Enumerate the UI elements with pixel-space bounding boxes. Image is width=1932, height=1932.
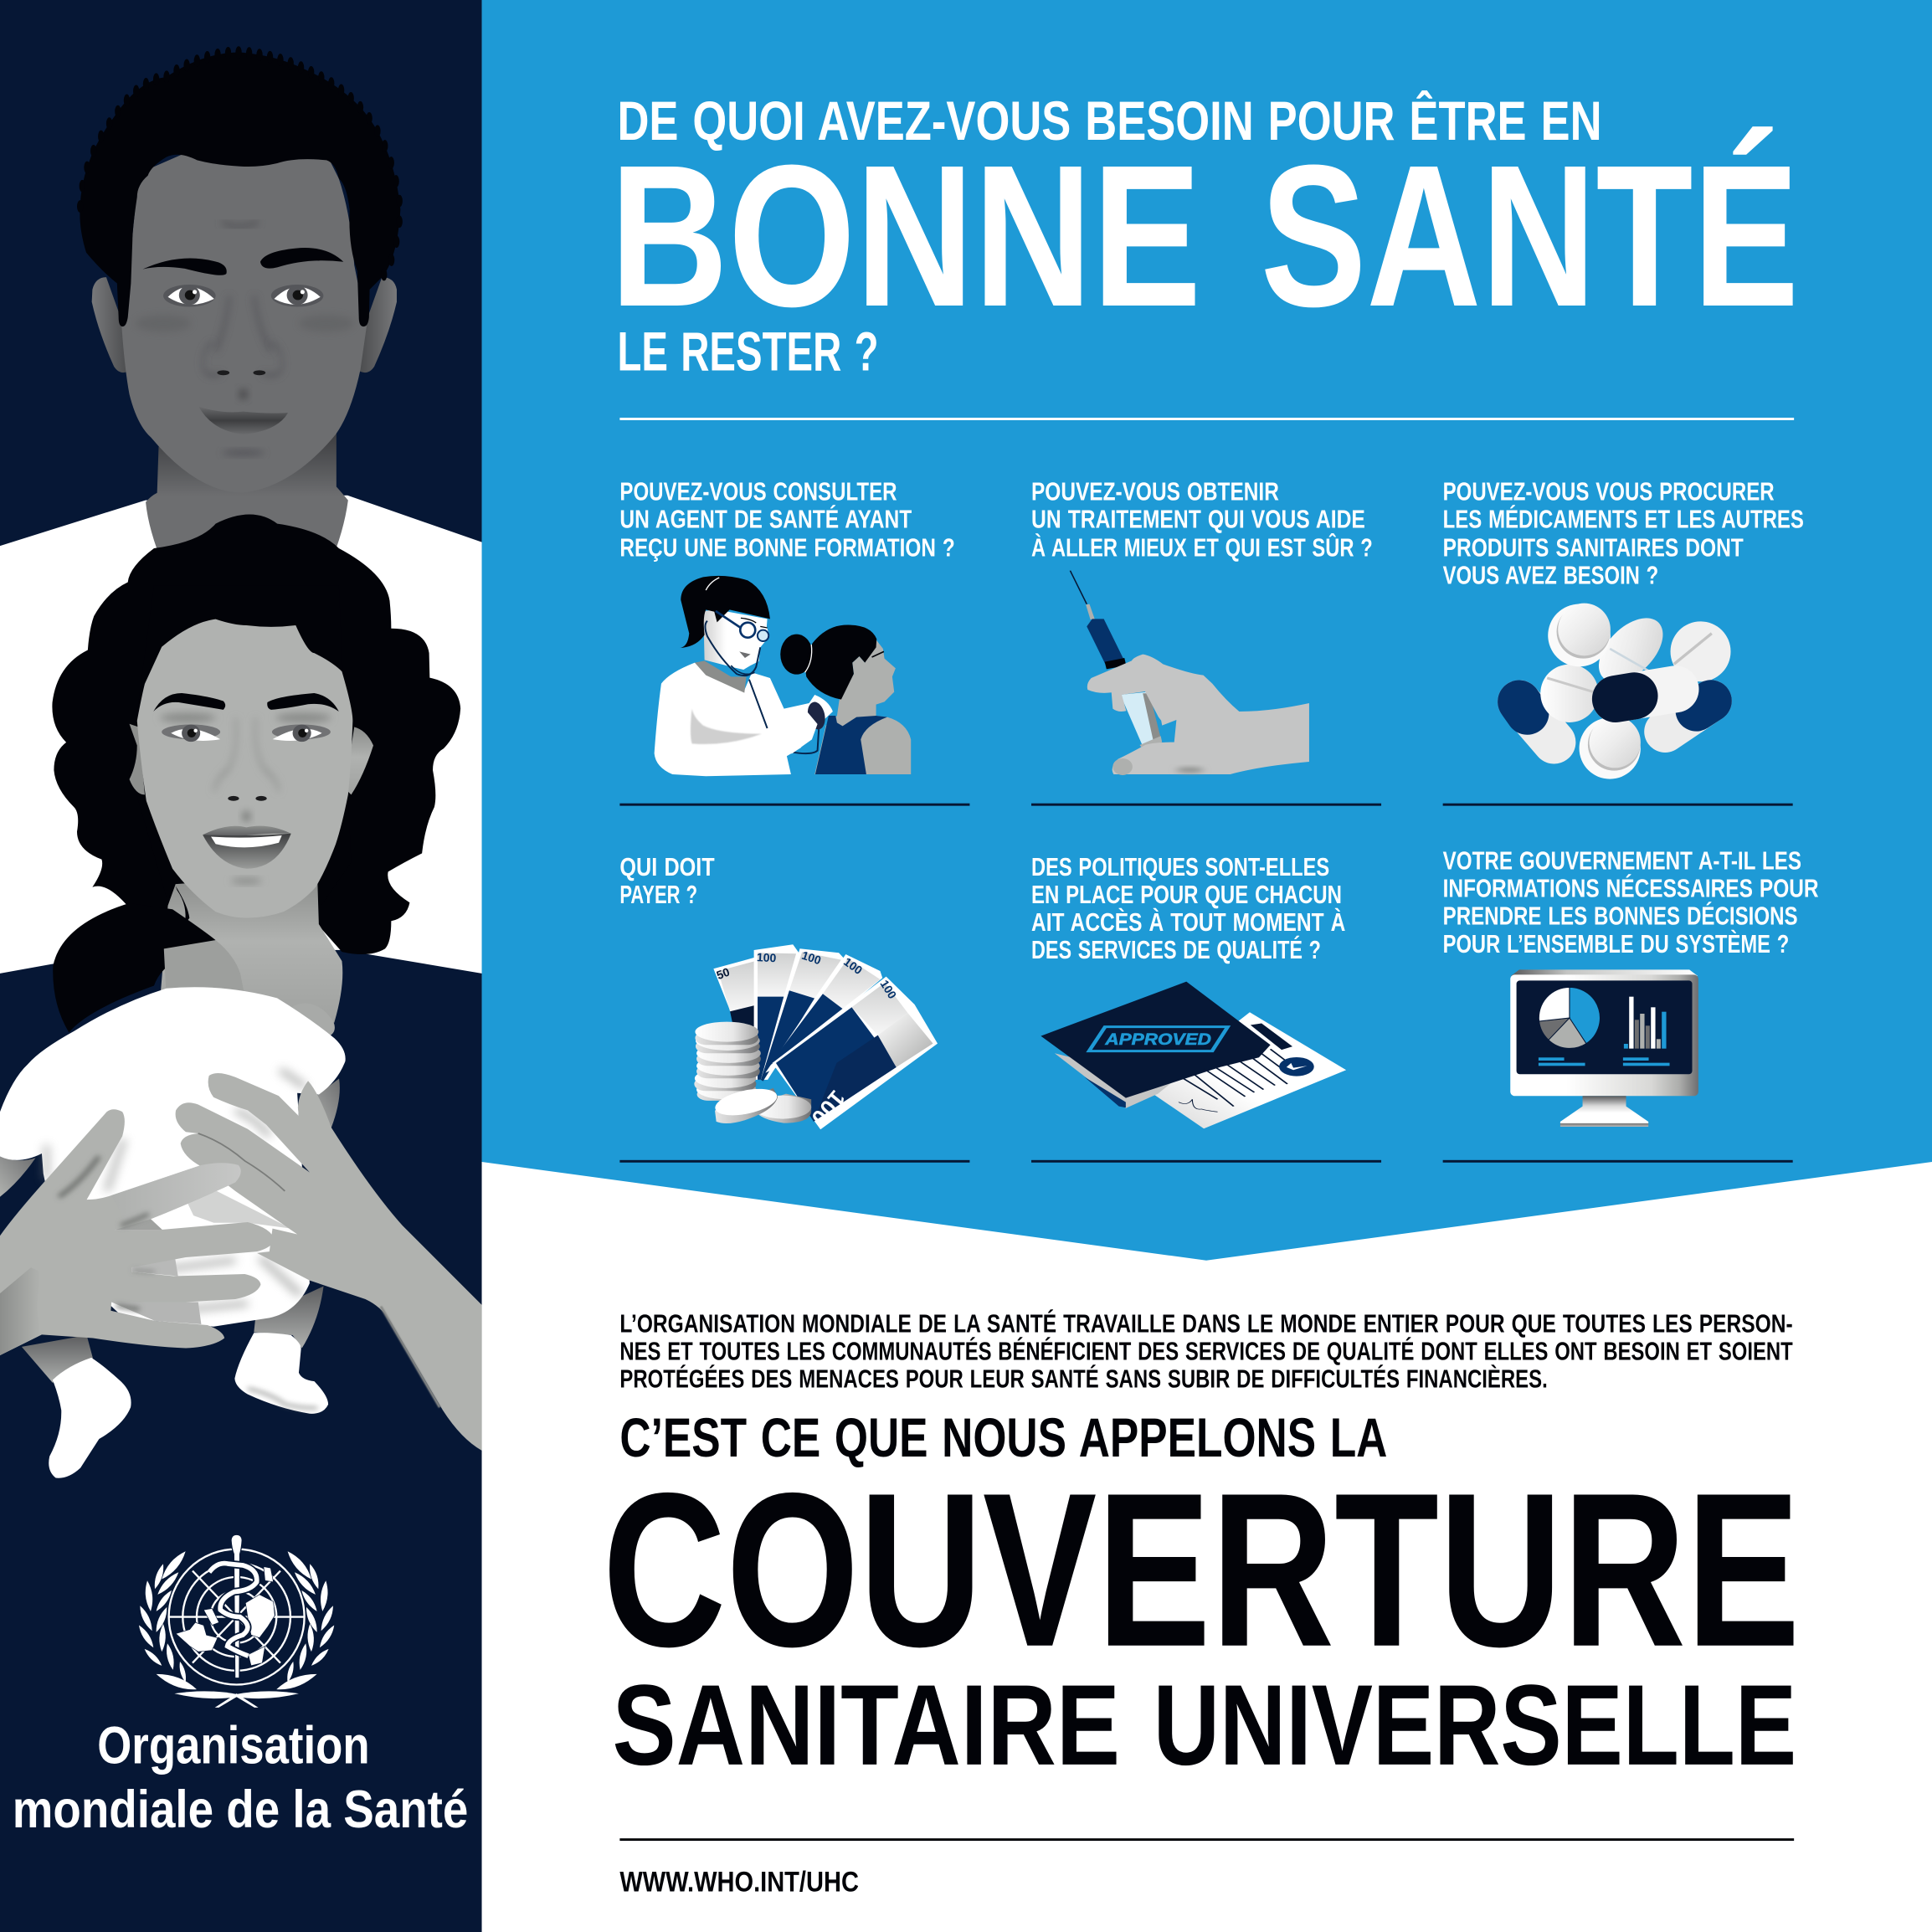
icon: doctor and patient	[655, 576, 911, 776]
text: website address: WWW.WHO.INT/UHC	[619, 1866, 859, 1898]
far-side arm and hand	[176, 1073, 482, 1451]
icon: pills	[1519, 604, 1731, 779]
heading: universal health coverage: SANITAIRE	[613, 1662, 1120, 1790]
logo text: Organisation mondiale de la Santé: Organisation	[97, 1716, 370, 1775]
text block: WHO statement	[619, 1310, 1793, 1393]
panel: left portrait column	[0, 0, 482, 1932]
text block: government information: PRENDRE LES BONNES DÉCISIONS	[1443, 902, 1798, 931]
icon: computer monitor with charts	[1510, 969, 1698, 1127]
panel: blue header background	[482, 0, 1932, 1932]
text block: government information	[1443, 847, 1819, 958]
banknote values: 100	[806, 1086, 850, 1131]
baby body	[0, 987, 346, 1327]
baby head	[53, 903, 216, 1032]
text block: WHO statement: PROTÉGÉES DES MENACES POUR LEUR SANTÉ SANS SUBIR DE DIFFICULTÉS FINANCIÈRES.	[619, 1364, 1548, 1393]
baby arm and rear shade	[0, 1157, 36, 1197]
icon: approved folder and document	[1041, 982, 1346, 1128]
patient	[780, 625, 911, 774]
text block: government information: VOTRE GOUVERNEMENT A-T-IL LES	[1443, 847, 1801, 875]
text block: who pays	[619, 854, 715, 909]
text block: question treatment: UN TRAITEMENT QUI VOUS AIDE	[1031, 506, 1365, 534]
bar chart	[1624, 997, 1667, 1049]
heading: universal health coverage: C’EST CE QUE NOUS APPELONS LA	[619, 1407, 1387, 1468]
woman nose and mouth	[203, 717, 291, 884]
shadows on body	[46, 1070, 305, 1312]
text block: question treatment	[1031, 479, 1373, 563]
woman neck and chest	[160, 875, 342, 1023]
logo text: Organisation mondiale de la Santé: mondiale de la Santé	[13, 1780, 468, 1839]
text block: question treatment: POUVEZ-VOUS OBTENIR	[1031, 479, 1279, 506]
text block: who pays: PAYER ?	[619, 881, 697, 909]
approved stamp text: APPROVED	[1104, 1031, 1211, 1049]
text block: government information: POUR L’ENSEMBLE DU SYSTÈME ?	[1443, 930, 1789, 958]
text block: government information: INFORMATIONS NÉCESSAIRES POUR	[1443, 875, 1819, 903]
banknote values: 100	[757, 950, 777, 964]
dividers row one	[619, 804, 1793, 806]
man eyebrows	[142, 248, 343, 275]
logo: WHO emblem	[139, 1534, 334, 1708]
man eyes	[163, 285, 323, 307]
logo wreath	[139, 1551, 239, 1708]
near-side hand	[0, 1109, 274, 1355]
banknote values: 100	[800, 948, 823, 967]
baby legs	[22, 1286, 324, 1383]
text block: question medicines: VOUS AVEZ BESOIN ?	[1443, 563, 1658, 590]
logo continents	[176, 1567, 275, 1666]
heading: universal health coverage: UNIVERSELLE	[1154, 1662, 1796, 1790]
text block: question treatment: À ALLER MIEUX ET QUI EST SÛR ?	[1031, 534, 1373, 563]
logo text: Organisation mondiale de la Santé	[13, 1716, 468, 1839]
text block: question health worker: REÇU UNE BONNE FORMATION ?	[619, 535, 955, 563]
text block: who pays: QUI DOIT	[619, 854, 715, 881]
text block: question medicines: POUVEZ-VOUS VOUS PROCURER	[1443, 479, 1775, 506]
heading: main title: BONNE	[610, 123, 1201, 349]
text block: question health worker: POUVEZ-VOUS CONSULTER	[619, 479, 897, 506]
text block: question health worker	[619, 479, 955, 563]
icon: banknotes and coins	[694, 944, 938, 1131]
man nose and mouth	[198, 342, 288, 456]
logo staff and snake	[209, 1534, 257, 1678]
illustration: baby and hands	[0, 903, 482, 1478]
mother's far hand	[292, 1003, 335, 1037]
text block: policies	[1031, 854, 1345, 964]
icon: hand holding syringe	[1070, 571, 1309, 775]
illustration: man portrait	[80, 53, 400, 549]
woman eyes	[162, 725, 331, 742]
banknote values: 100	[877, 978, 899, 1001]
illustration: woman portrait	[52, 515, 460, 1023]
text block: question medicines: LES MÉDICAMENTS ET LES AUTRES	[1443, 506, 1804, 534]
dividers row two	[619, 1160, 1793, 1163]
text block: question health worker: UN AGENT DE SANTÉ AYANT	[619, 506, 912, 534]
text block: policies: EN PLACE POUR QUE CHACUN	[1031, 881, 1342, 909]
baby socks	[49, 1333, 328, 1478]
banknote values	[715, 948, 899, 1131]
heading: main title: DE QUOI AVEZ-VOUS BESOIN POUR ÊTRE EN	[617, 90, 1602, 152]
heading: main title	[610, 90, 1799, 382]
heading: main title: SANTÉ	[1261, 123, 1799, 349]
text block: question medicines: PRODUITS SANITAIRES DONT	[1443, 535, 1744, 563]
text block: policies: DES SERVICES DE QUALITÉ ?	[1031, 936, 1321, 964]
text block: policies: DES POLITIQUES SONT-ELLES	[1031, 854, 1329, 881]
text block: question medicines	[1443, 479, 1804, 590]
heading: universal health coverage	[603, 1407, 1801, 1790]
text block: policies: AIT ACCÈS À TOUT MOMENT À	[1031, 908, 1345, 937]
banknote values: 50	[715, 965, 732, 982]
heading: main title: LE RESTER ?	[617, 321, 878, 382]
banknote values: 100	[841, 955, 865, 977]
chart legends	[1539, 1057, 1670, 1066]
doctor	[655, 576, 833, 776]
pie chart	[1539, 987, 1600, 1048]
woman eyebrows	[153, 693, 339, 712]
